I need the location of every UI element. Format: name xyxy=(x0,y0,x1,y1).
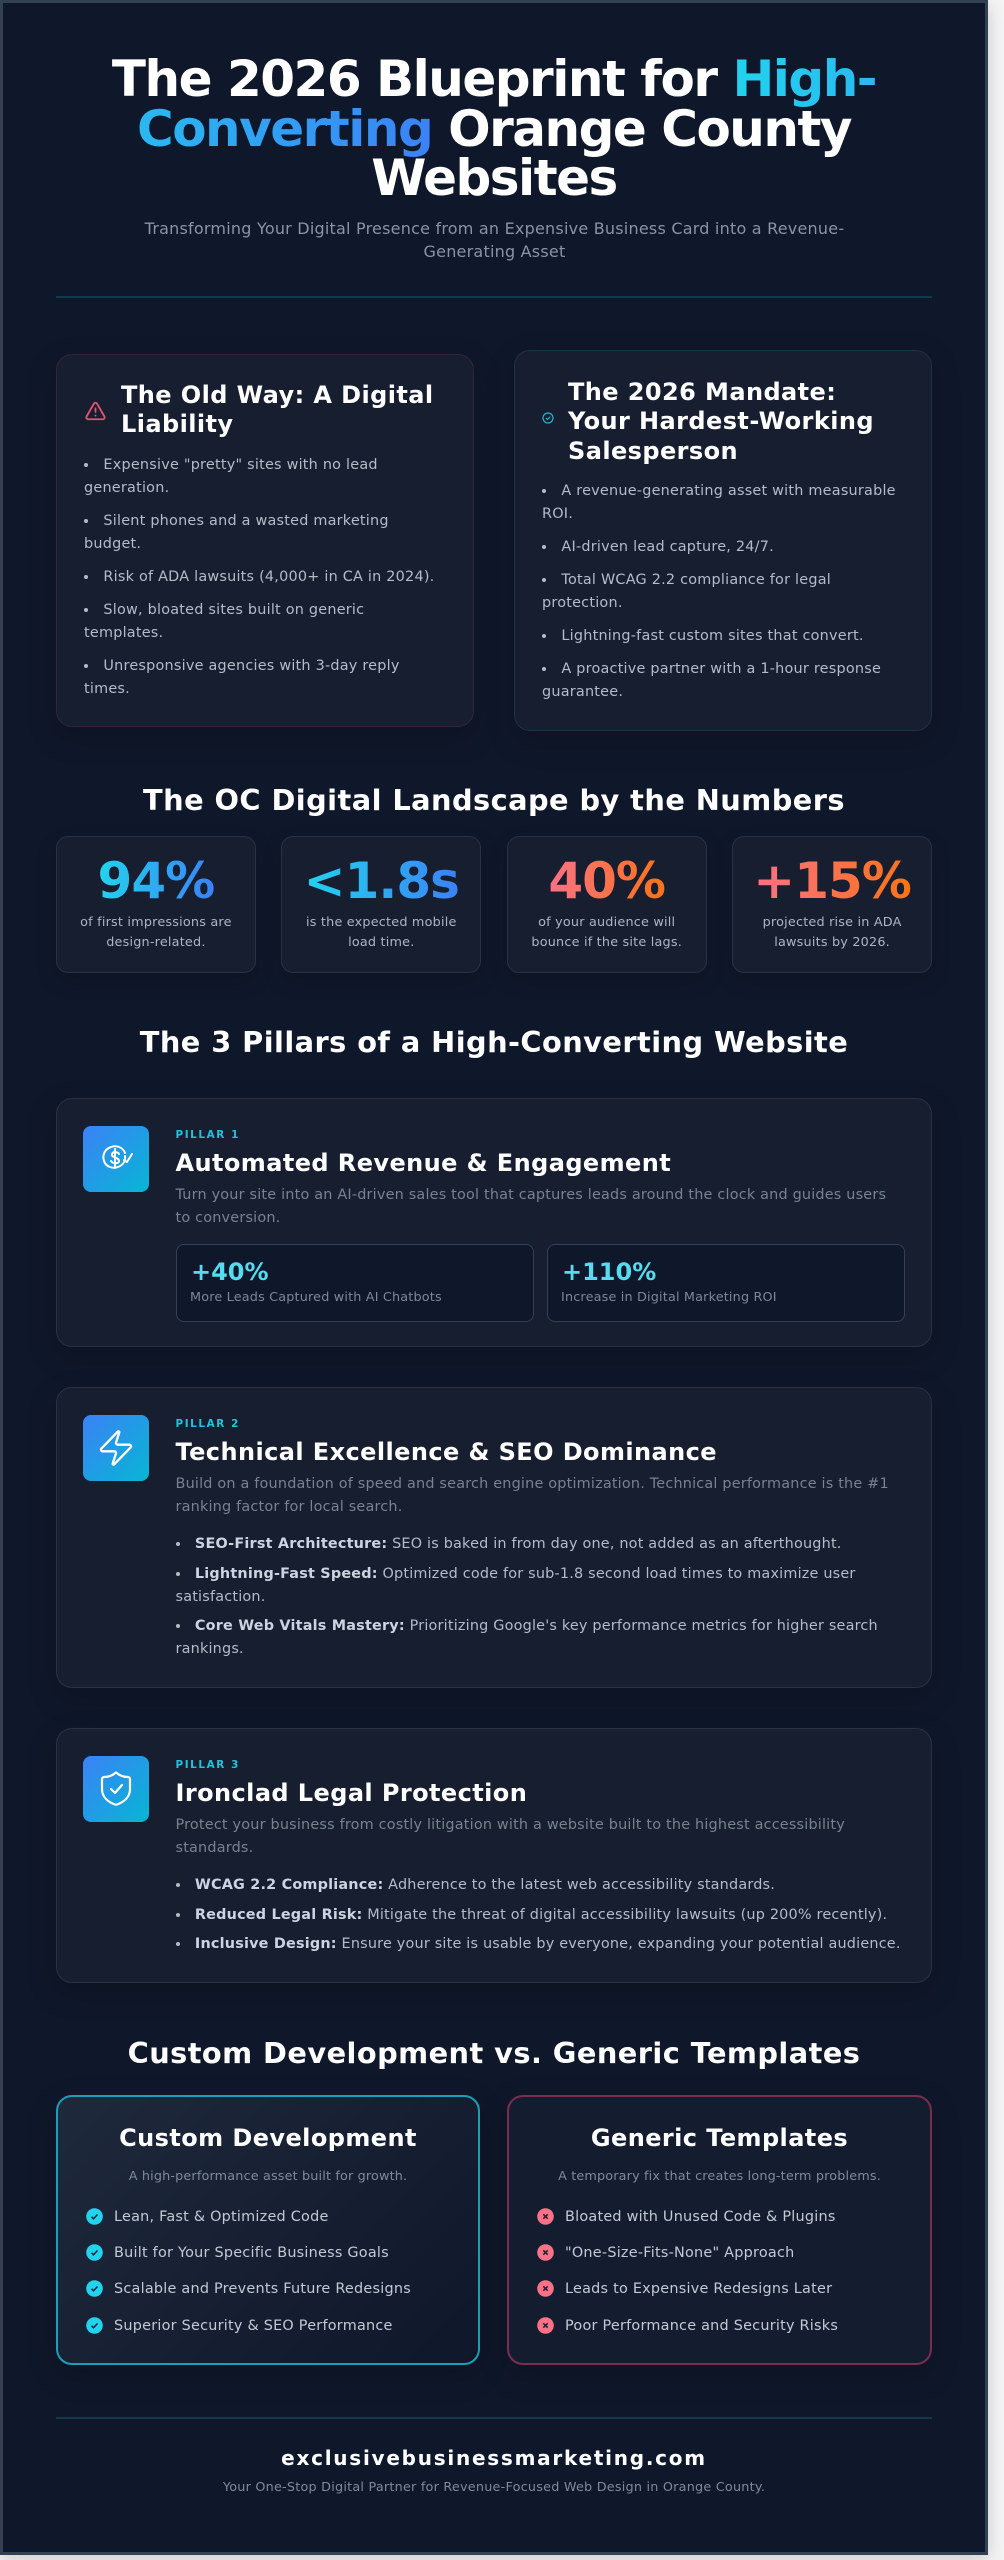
list: old way problems: Expensive "pretty" sites with no lead generation. xyxy=(84,457,378,496)
item: scalable: Scalable and Prevents Future Redesigns xyxy=(114,2281,411,2297)
list: old way problems: Unresponsive agencies with 3-day reply times. xyxy=(84,658,400,697)
heading: three pillars: The 3 Pillars of a High-Converting Website xyxy=(140,1025,848,1059)
icon: lightning bolt xyxy=(83,1414,149,1480)
stat card: 40% xyxy=(507,836,707,973)
stat card: 94%: of first impressions are design-related. xyxy=(80,915,232,950)
list: mandate benefits: Lightning-fast custom sites that convert. xyxy=(561,628,864,644)
subheading: custom development: A high-performance asset built for growth. xyxy=(129,2169,407,2184)
label: pillar 2: PILLAR 2 xyxy=(176,1418,240,1430)
description: pillar 1: Turn your site into an AI-driven sales tool that captures leads around the clock and guides users to conversion. xyxy=(176,1187,886,1226)
icon: check circle xyxy=(542,412,554,424)
list: pillar 2 features: Lightning-Fast Speed: Optimized code for sub-1.8 second load times to maximize user satisfaction. xyxy=(176,1566,856,1605)
list: mandate benefits: A revenue-generating asset with measurable ROI. xyxy=(542,482,896,522)
list: pillar 3 features: WCAG 2.2 Compliance: Adherence to the latest web accessibility standards. xyxy=(195,1877,775,1893)
heading: pillar 3: Ironclad Legal Protection xyxy=(176,1779,527,1807)
stat card: +15%: +15% xyxy=(753,852,911,910)
stat box: +40%: +40% xyxy=(191,1258,269,1286)
list: old way problems: Slow, bloated sites built on generic templates. xyxy=(84,602,364,641)
item: poor performance: Poor Performance and Security Risks xyxy=(565,2318,838,2334)
list: pillar 2 features: SEO-First Architecture: SEO is baked in from day one, not added as an afterthought. xyxy=(195,1536,842,1552)
footer: website: exclusivebusinessmarketing.com xyxy=(281,2446,707,2470)
list: pillar 3 features: Reduced Legal Risk: Mitigate the threat of digital accessibility lawsuits (up 200% recently). xyxy=(195,1907,887,1923)
stat card: 94%: 94% xyxy=(98,852,214,910)
list: mandate benefits: A proactive partner with a 1-hour response guarantee. xyxy=(542,661,881,700)
panel: custom development xyxy=(56,2095,480,2365)
list: pillar 3 features xyxy=(176,1877,901,1952)
heading: custom vs generic: Custom Development vs. Generic Templates xyxy=(128,2036,860,2070)
panel: the 2026 mandate xyxy=(514,350,932,731)
heading: landscape numbers: The OC Digital Landscape by the Numbers xyxy=(143,783,845,817)
stat box: +40% xyxy=(176,1244,534,1322)
stat card: 40%: 40% xyxy=(548,852,665,910)
description: pillar 2: Build on a foundation of speed and search engine optimization. Technical performance is the #1 ranking factor for local search. xyxy=(176,1476,889,1515)
stat box: +110% xyxy=(547,1244,905,1322)
stat card: under 1.8s: is the expected mobile load time. xyxy=(306,915,457,950)
list: mandate benefits: AI-driven lead capture, 24/7. xyxy=(561,539,774,555)
panel: pillar 3 xyxy=(56,1728,932,1983)
icon: warning triangle xyxy=(85,402,106,420)
item: one size: "One-Size-Fits-None" Approach xyxy=(565,2245,794,2261)
item: bloated: Bloated with Unused Code & Plugins xyxy=(565,2209,836,2225)
panel: the old way xyxy=(56,354,474,727)
heading: pillar 2: Technical Excellence & SEO Dominance xyxy=(176,1438,717,1466)
list: old way problems: Risk of ADA lawsuits (4,000+ in CA in 2024). xyxy=(103,569,434,585)
icon: shield with check xyxy=(83,1756,149,1822)
heading: pillar 1: Automated Revenue & Engagement xyxy=(176,1149,671,1177)
stat box: +40%: More Leads Captured with AI Chatbots xyxy=(190,1290,442,1305)
item: security and SEO: Superior Security & SEO Performance xyxy=(114,2318,393,2334)
heading: custom development: Custom Development xyxy=(119,2124,417,2152)
list: mandate benefits xyxy=(542,482,896,700)
subtitle: Transforming Your Digital Presence from an Expensive Business Card into a Revenue-Generating Asset xyxy=(145,219,844,261)
item: expensive redesigns: Leads to Expensive Redesigns Later xyxy=(565,2281,832,2297)
list: pillar 2 features: Core Web Vitals Mastery: Prioritizing Google's key performance metrics for higher search rankings. xyxy=(176,1618,878,1657)
label: pillar 1: PILLAR 1 xyxy=(176,1129,240,1141)
description: pillar 3: Protect your business from costly litigation with a website built to the highest accessibility standards. xyxy=(176,1817,845,1856)
list: mandate benefits: Total WCAG 2.2 compliance for legal protection. xyxy=(542,572,831,611)
title: The 2026 Blueprint for High-Converting Orange County Websites xyxy=(112,50,876,207)
footer: tagline: Your One-Stop Digital Partner for Revenue-Focused Web Design in Orange County. xyxy=(223,2480,765,2495)
stat card: 94% xyxy=(56,836,256,973)
stat card: under 1.8s xyxy=(281,836,481,973)
heading: generic templates: Generic Templates xyxy=(591,2124,848,2152)
stat card: under 1.8s: <1.8s xyxy=(304,852,459,910)
heading: the 2026 mandate: The 2026 Mandate: Your Hardest-Working Salesperson xyxy=(568,378,874,465)
panel: pillar 1 xyxy=(56,1098,932,1347)
stat box: +110%: +110% xyxy=(562,1258,656,1286)
list: pillar 3 features: Inclusive Design: Ensure your site is usable by everyone, expanding your potential audience. xyxy=(195,1936,901,1952)
item: lean fast code: Lean, Fast & Optimized Code xyxy=(114,2209,329,2225)
list: old way problems xyxy=(84,457,434,697)
panel: pillar 2 xyxy=(56,1387,932,1688)
item: built for goals: Built for Your Specific Business Goals xyxy=(114,2245,389,2261)
heading: the old way: The Old Way: A Digital Liability xyxy=(121,381,434,438)
stat card: 40%: of your audience will bounce if the site lags. xyxy=(531,915,682,950)
icon: dollar with check xyxy=(83,1126,149,1192)
label: pillar 3: PILLAR 3 xyxy=(176,1759,240,1771)
panel: generic templates xyxy=(507,2095,932,2365)
stat card: +15%: projected rise in ADA lawsuits by 2026. xyxy=(763,915,902,950)
list: pillar 2 features xyxy=(176,1536,878,1657)
list: old way problems: Silent phones and a wasted marketing budget. xyxy=(84,513,389,552)
stat box: +110%: Increase in Digital Marketing ROI xyxy=(561,1290,777,1305)
subheading: generic templates: A temporary fix that creates long-term problems. xyxy=(558,2169,881,2184)
stat card: +15% xyxy=(732,836,932,973)
